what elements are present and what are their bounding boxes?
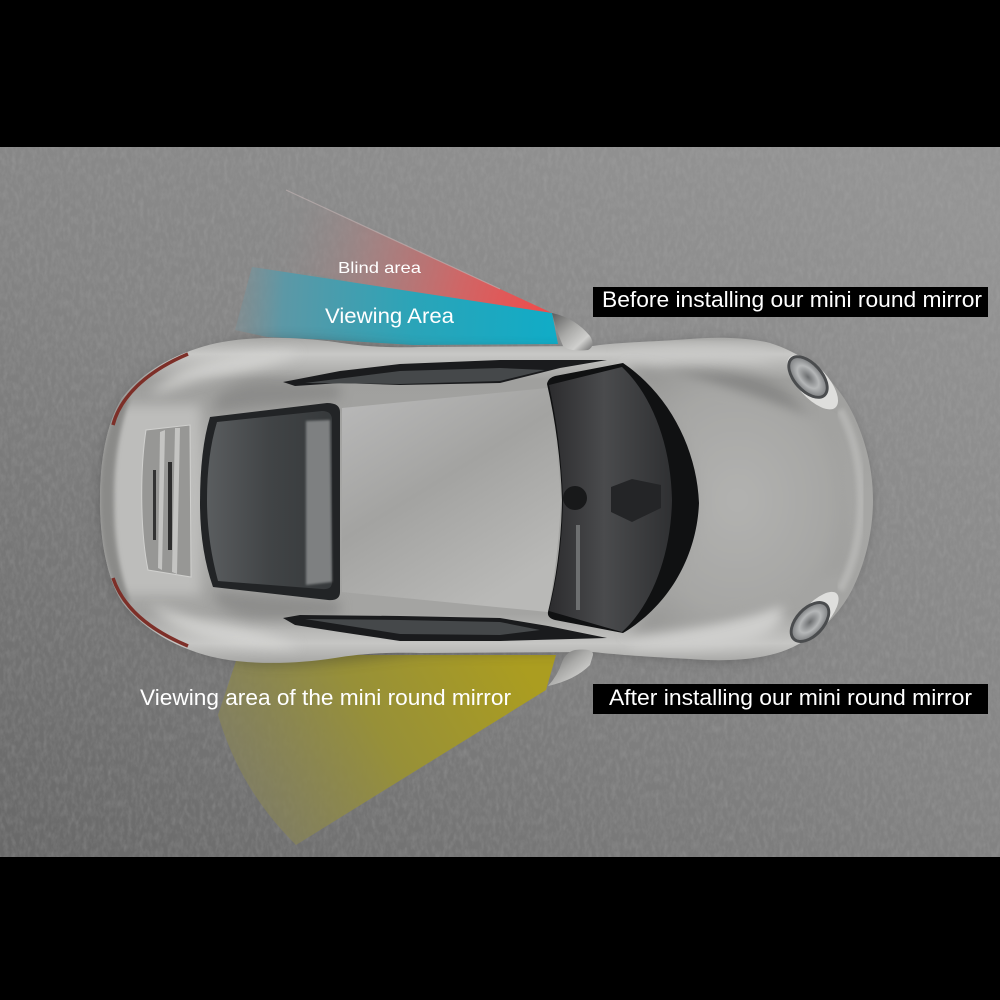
rear fender shadow top	[215, 380, 340, 412]
blind area wedge	[270, 190, 552, 313]
bottom side window	[283, 615, 607, 641]
rear fender highlight bottom	[154, 605, 282, 648]
label: viewing area: Viewing Area	[325, 305, 454, 328]
rear deck	[108, 405, 205, 595]
top door mirror	[552, 313, 593, 350]
hood	[630, 363, 804, 638]
label: blind area: Blind area	[338, 260, 421, 277]
bottom door mirror	[548, 650, 593, 686]
mini round mirror viewing area wedge	[218, 655, 556, 845]
engine vents	[142, 425, 191, 577]
top side window glass	[305, 368, 545, 384]
front fender highlight bottom	[630, 605, 783, 648]
body shading	[100, 346, 861, 648]
rear fender shadow bottom	[215, 590, 340, 620]
rear window	[200, 403, 340, 600]
red reflector top	[113, 354, 188, 425]
bottom side window glass	[305, 619, 540, 635]
callout: after installing: After installing our mini round mirror	[609, 685, 972, 710]
label: viewing area of the mini round mirror: Viewing area of the mini round mirror	[140, 685, 511, 710]
callout: before installing: Before installing our mini round mirror	[602, 287, 982, 312]
red reflector bottom	[113, 578, 188, 646]
top side window	[283, 360, 607, 386]
nose edge shade	[840, 410, 861, 590]
front fender highlight top	[620, 346, 771, 364]
windshield	[547, 363, 699, 633]
rear bumper shade	[100, 398, 130, 602]
car	[100, 338, 873, 665]
bottom headlight	[782, 583, 848, 651]
top headlight	[779, 347, 847, 418]
rear fender highlight top	[154, 354, 284, 396]
roof panel	[342, 388, 561, 612]
car shadow	[100, 339, 871, 665]
viewing area wedge	[235, 267, 558, 345]
road surface panel	[0, 147, 1000, 857]
front fender shadow top	[674, 364, 802, 412]
car body	[100, 338, 873, 663]
